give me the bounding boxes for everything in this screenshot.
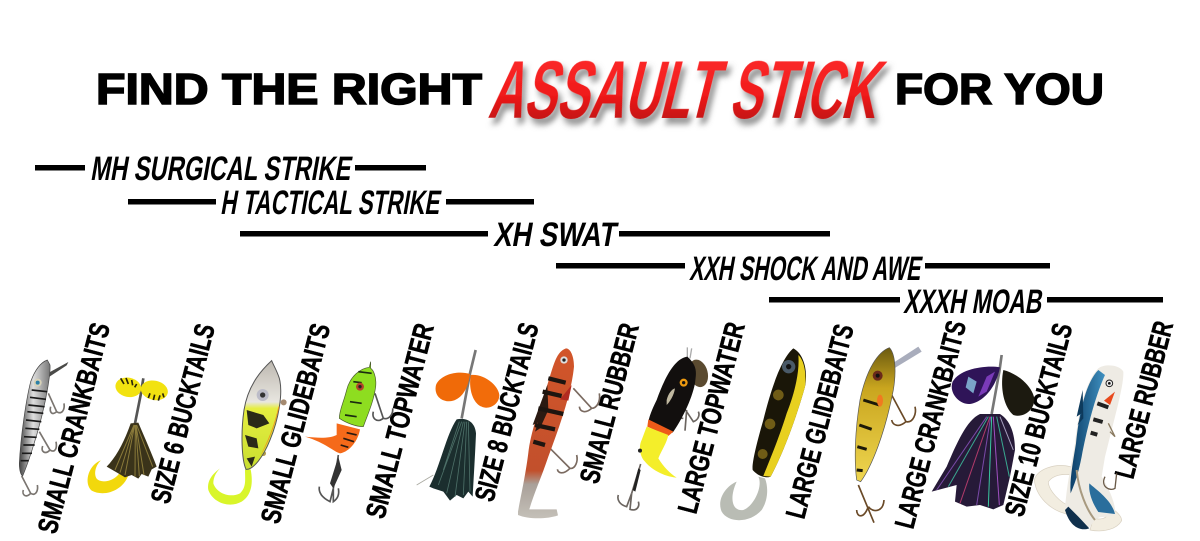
rod range: H Tactical Strike: H TACTICAL STRIKE bbox=[219, 184, 444, 222]
rod range: XXXH MOAB: XXXH MOAB bbox=[902, 283, 1046, 321]
icon: small rubber lure bbox=[518, 348, 600, 518]
icon: large crankbait lure bbox=[855, 347, 922, 523]
label: small rubber: SMALL RUBBER bbox=[574, 320, 645, 487]
label: large topwater: LARGE TOPWATER bbox=[672, 319, 751, 517]
rod range: XXH Shock and Awe: XXH SHOCK AND AWE bbox=[688, 250, 925, 288]
lures, right group bbox=[855, 347, 1123, 531]
icon: size 6 bucktail lure bbox=[88, 375, 170, 493]
rod range: XXXH MOAB bbox=[769, 283, 1163, 321]
icon: large glidebait lure bbox=[720, 348, 806, 520]
rod range: XH SWAT bbox=[240, 216, 830, 254]
lures, middle group bbox=[417, 347, 806, 520]
label: size 10 bucktails: SIZE 10 BUCKTAILS bbox=[999, 320, 1078, 520]
icon: size 10 bucktail lure bbox=[932, 355, 1034, 509]
lures, left group bbox=[19, 360, 393, 505]
title brand name: assault stick: ASSAULT STICK bbox=[483, 44, 893, 136]
title bbox=[96, 44, 1104, 136]
title text: find the right: FIND THE RIGHT bbox=[96, 65, 482, 114]
icon: small topwater lure bbox=[305, 362, 393, 502]
icon: small glidebait lure bbox=[208, 361, 287, 505]
label: small glidebaits: SMALL GLIDEBAITS bbox=[255, 320, 336, 527]
label: size 6 bucktails: SIZE 6 BUCKTAILS bbox=[145, 321, 221, 507]
label: large rubber: LARGE RUBBER bbox=[1109, 318, 1179, 482]
label: size 8 bucktails: SIZE 8 BUCKTAILS bbox=[469, 320, 545, 505]
label: small crankbaits: SMALL CRANKBAITS bbox=[32, 320, 116, 537]
rod range: XH SWAT: XH SWAT bbox=[492, 216, 620, 254]
label: large glidebaits: LARGE GLIDEBAITS bbox=[780, 321, 860, 522]
icon: size 8 bucktail lure bbox=[417, 350, 499, 501]
icon: small crankbait lure bbox=[19, 360, 68, 496]
title text: for you: FOR YOU bbox=[895, 65, 1104, 114]
label: small topwater: SMALL TOPWATER bbox=[360, 320, 440, 522]
lure labels bbox=[32, 318, 1179, 537]
rod range: MH Surgical Strike: MH SURGICAL STRIKE bbox=[89, 150, 355, 188]
icon: large topwater lure bbox=[618, 347, 711, 510]
label: large crankbaits: LARGE CRANKBAITS bbox=[889, 318, 972, 532]
icon: large rubber lure bbox=[1034, 365, 1123, 531]
